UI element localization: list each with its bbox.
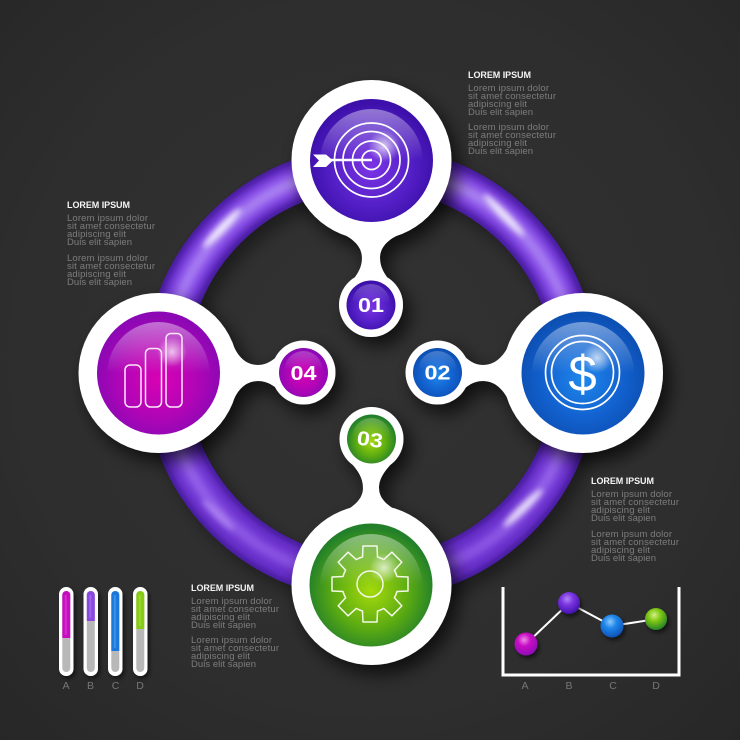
chart: vertical level bars [59, 587, 148, 692]
text block: left: adipiscing elit [67, 229, 126, 240]
bar C: C [112, 680, 120, 692]
text block: right: Lorem ipsum dolor [591, 489, 672, 500]
text block: left: sit amet consectetur [67, 221, 155, 232]
panel: 02 dollar node [406, 293, 663, 453]
axis labels: C [609, 680, 617, 692]
text block: left [67, 200, 155, 288]
small ball 01: 01 [358, 295, 384, 317]
ring [166, 168, 583, 587]
glossy ball 03 [310, 524, 432, 646]
white connector shape 03 [292, 407, 452, 665]
glossy ball 02 [522, 312, 644, 434]
text block: bottom: LOREM IPSUM [191, 583, 254, 593]
text block: left: adipiscing elit [67, 269, 126, 280]
white connector shape 04 [78, 293, 336, 453]
text block: left: Duis elit sapien [67, 237, 132, 248]
axis labels: D [652, 680, 660, 692]
text block: right: Lorem ipsum dolor [591, 529, 672, 540]
icon: target and arrow [313, 123, 408, 197]
text block: top right: Lorem ipsum dolor [468, 83, 549, 94]
small ball 04: 04 [290, 363, 318, 385]
icon: bar chart [125, 334, 182, 407]
text block: top right: LOREM IPSUM [468, 70, 531, 80]
text block: left: Lorem ipsum dolor [67, 213, 148, 224]
text block: right: Duis elit sapien [591, 513, 656, 524]
glossy ball 01 [310, 99, 433, 222]
point D [645, 608, 667, 630]
bar D: D [136, 680, 144, 692]
point C [600, 614, 624, 638]
axis labels: A [521, 680, 529, 692]
text block: bottom: Lorem ipsum dolor [191, 635, 272, 646]
chart axes [503, 587, 679, 675]
text block: right: adipiscing elit [591, 545, 650, 556]
text block: right [591, 476, 679, 564]
text block: left: Lorem ipsum dolor [67, 253, 148, 264]
text block: top right: adipiscing elit [468, 138, 527, 149]
small ball 03: 03 [355, 428, 384, 453]
text block: bottom: Duis elit sapien [191, 659, 256, 670]
text block: top right [468, 70, 556, 157]
white connector shape 01 [292, 80, 452, 337]
icon: dollar coin: $ [568, 345, 597, 402]
text block: top right: sit amet consectetur [468, 91, 556, 102]
bar B: B [87, 680, 94, 692]
small ball 03 [347, 414, 396, 464]
point A [514, 632, 538, 656]
icon: dollar coin [546, 336, 620, 410]
text block: bottom: sit amet consectetur [191, 643, 279, 654]
small ball 02 [413, 348, 462, 397]
glossy ball 04 [97, 312, 220, 434]
text block: top right: Duis elit sapien [468, 146, 533, 157]
text block: top right: adipiscing elit [468, 99, 527, 110]
text block: right: adipiscing elit [591, 505, 650, 516]
text block: right: sit amet consectetur [591, 537, 679, 548]
panel: 03 gear node [292, 407, 452, 665]
text block: bottom [191, 583, 279, 670]
small ball 02: 02 [424, 362, 450, 384]
text block: left: sit amet consectetur [67, 261, 155, 272]
text block: bottom: Lorem ipsum dolor [191, 596, 272, 607]
panel: 04 bars node [78, 293, 336, 453]
chart: line chart with spheres [503, 587, 679, 692]
chart line [526, 603, 656, 644]
icon: gear [332, 546, 408, 622]
text block: bottom: Duis elit sapien [191, 620, 256, 631]
white connector shape 02 [406, 293, 663, 453]
text block: top right: sit amet consectetur [468, 130, 556, 141]
text block: left: LOREM IPSUM [67, 200, 130, 210]
text block: bottom: sit amet consectetur [191, 604, 279, 615]
bar A: A [62, 680, 70, 692]
small ball 01 [346, 280, 396, 330]
axis labels: B [565, 680, 573, 692]
text block: left: Duis elit sapien [67, 277, 132, 288]
axis labels [521, 680, 660, 692]
text block: bottom: adipiscing elit [191, 651, 250, 662]
text block: right: Duis elit sapien [591, 553, 656, 564]
text block: right: LOREM IPSUM [591, 476, 654, 486]
text block: bottom: adipiscing elit [191, 612, 250, 623]
small ball 04 [279, 348, 328, 397]
point B [558, 592, 580, 614]
text block: top right: Duis elit sapien [468, 107, 533, 118]
text block: top right: Lorem ipsum dolor [468, 122, 549, 133]
text block: right: sit amet consectetur [591, 497, 679, 508]
panel: 01 target node [292, 80, 452, 337]
